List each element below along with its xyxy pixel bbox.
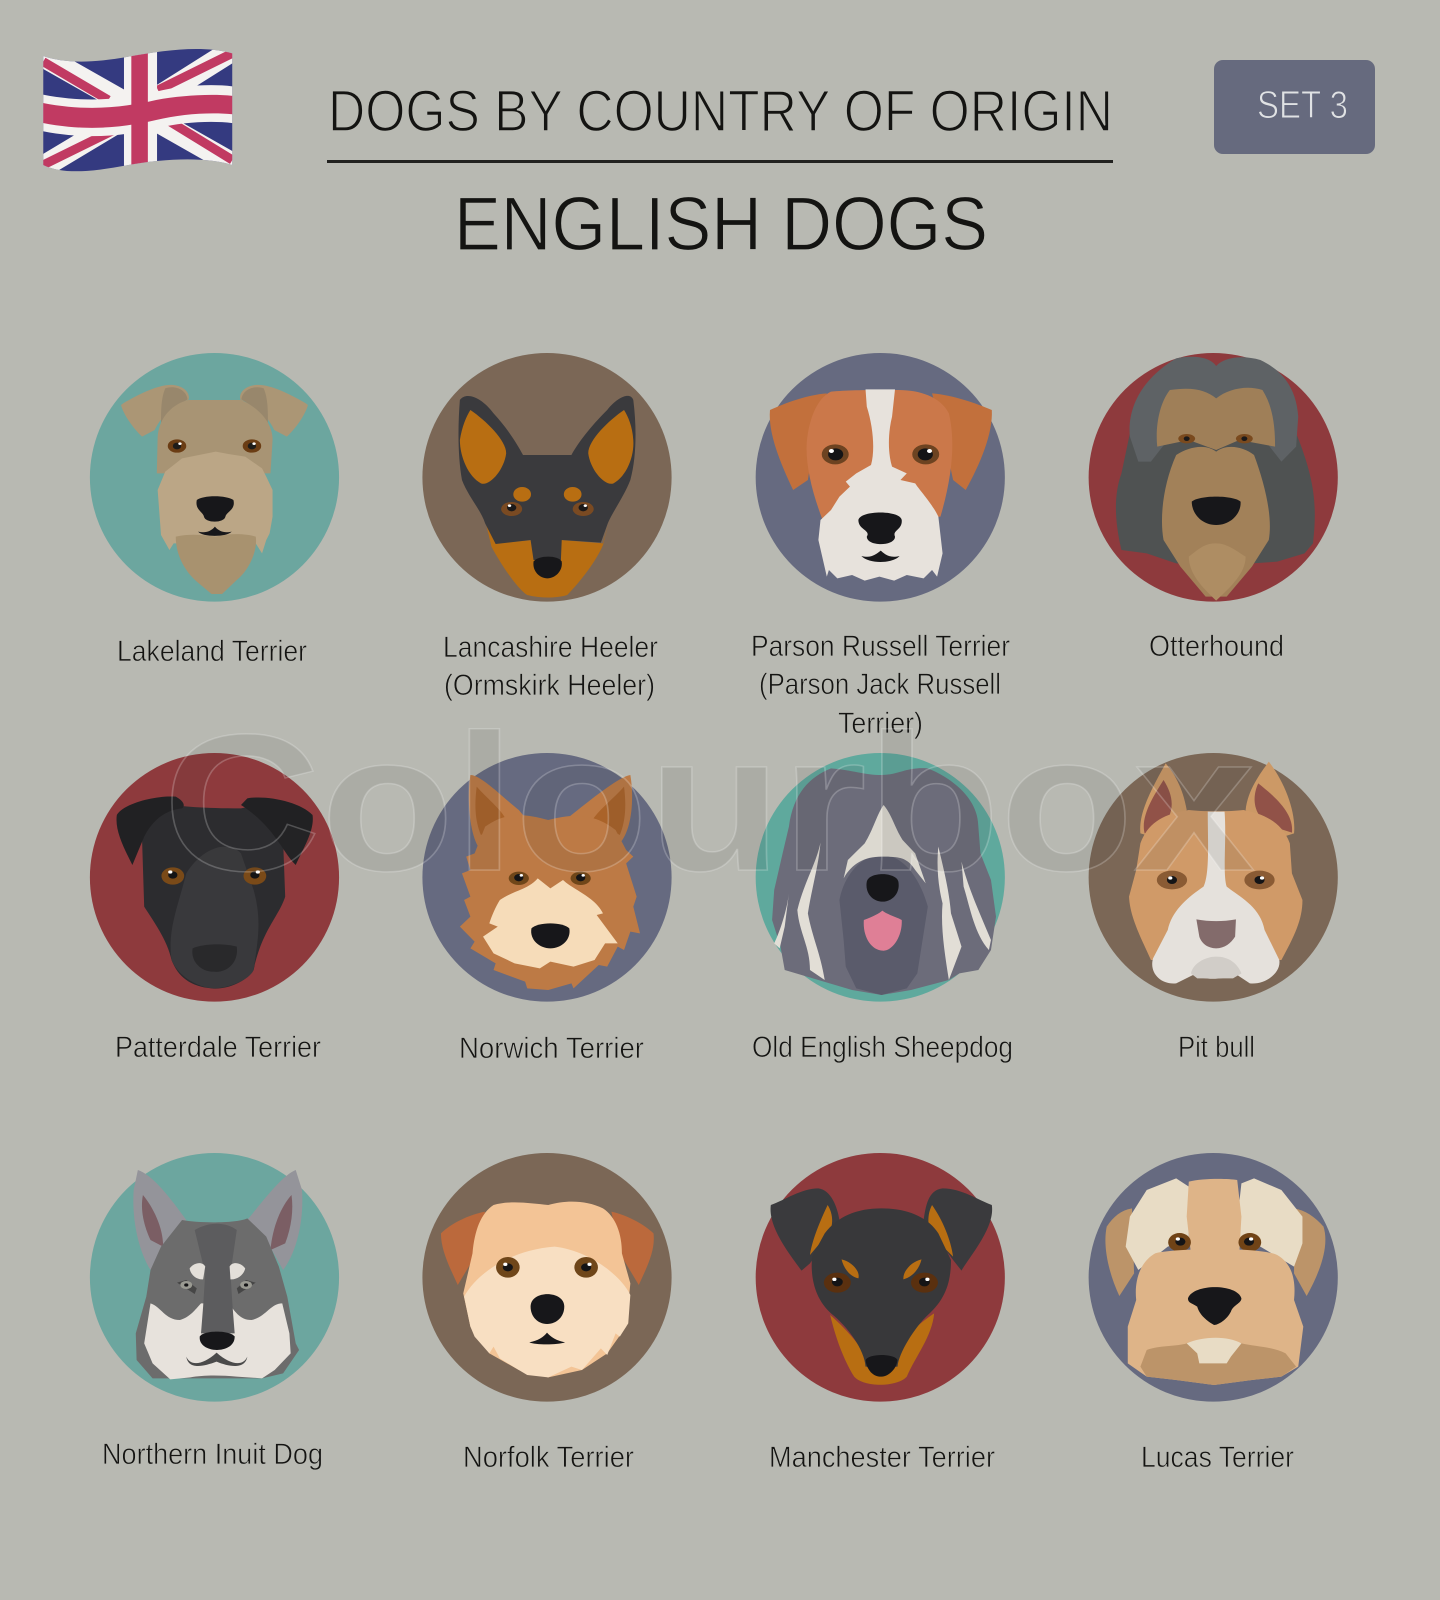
label: Old English Sheepdog: Old English Sheepdog — [752, 1031, 1013, 1064]
heading: English dogs: ENGLISH DOGS — [454, 182, 988, 267]
badge: set 3 — [1214, 60, 1375, 154]
label: Lakeland Terrier: Lakeland Terrier — [117, 635, 307, 668]
icon: waving UK flag — [43, 49, 232, 172]
icon: Patterdale Terrier portrait — [90, 753, 339, 1002]
card: Northern Inuit Dog — [90, 1153, 339, 1471]
card: Norfolk Terrier — [422, 1153, 672, 1474]
card: Lakeland Terrier — [90, 353, 339, 668]
label: Norfolk Terrier: Norfolk Terrier — [463, 1441, 634, 1474]
card: Lancashire Heeler — [422, 353, 672, 702]
watermark: Colourbox: Colourbox — [163, 694, 1255, 912]
label: Parson Russell Terrier: Terrier) — [838, 707, 923, 740]
label: Manchester Terrier: Manchester Terrier — [769, 1441, 995, 1474]
label: Parson Russell Terrier — [751, 630, 1010, 740]
icon: Norfolk Terrier portrait — [422, 1153, 672, 1402]
card: Pit bull — [1089, 753, 1338, 1064]
icon: Northern Inuit Dog portrait — [90, 1153, 339, 1402]
title: dogs by country of origin: DOGS BY COUNTRY OF ORIGIN — [328, 79, 1113, 144]
icon: Lancashire Heeler portrait — [422, 353, 672, 602]
label: Norwich Terrier: Norwich Terrier — [459, 1032, 644, 1065]
label: Otterhound: Otterhound — [1149, 630, 1284, 663]
icon: Pit bull portrait — [1089, 753, 1338, 1002]
icon: Otterhound portrait — [1089, 353, 1338, 602]
card: Patterdale Terrier — [90, 753, 339, 1064]
icon: Lucas Terrier portrait — [1089, 1153, 1338, 1402]
label: Lucas Terrier: Lucas Terrier — [1141, 1441, 1294, 1474]
card: Parson Russell Terrier — [751, 353, 1010, 740]
card: Manchester Terrier — [756, 1153, 1005, 1474]
badge: set 3: SET 3 — [1257, 84, 1348, 127]
card: Norwich Terrier — [422, 753, 672, 1065]
icon: Norwich Terrier portrait — [422, 753, 672, 1002]
icon: Parson Russell Terrier portrait — [756, 353, 1005, 602]
label: Lancashire Heeler — [443, 631, 658, 702]
label: Pit bull: Pit bull — [1178, 1031, 1255, 1064]
label: Patterdale Terrier: Patterdale Terrier — [115, 1031, 321, 1064]
label: Parson Russell Terrier: (Parson Jack Russell — [759, 668, 1001, 701]
icon: Manchester Terrier portrait — [756, 1153, 1005, 1402]
label: Northern Inuit Dog: Northern Inuit Dog — [102, 1438, 323, 1471]
icon: Lakeland Terrier portrait — [90, 353, 339, 602]
label: Lancashire Heeler: Lancashire Heeler — [443, 631, 658, 664]
card: Old English Sheepdog — [752, 753, 1013, 1064]
label: Lancashire Heeler: (Ormskirk Heeler) — [444, 669, 655, 702]
card: Otterhound — [1089, 353, 1338, 663]
icon: Old English Sheepdog portrait — [756, 753, 1005, 1002]
card: Lucas Terrier — [1089, 1153, 1338, 1474]
label: Parson Russell Terrier: Parson Russell Terrier — [751, 630, 1010, 663]
